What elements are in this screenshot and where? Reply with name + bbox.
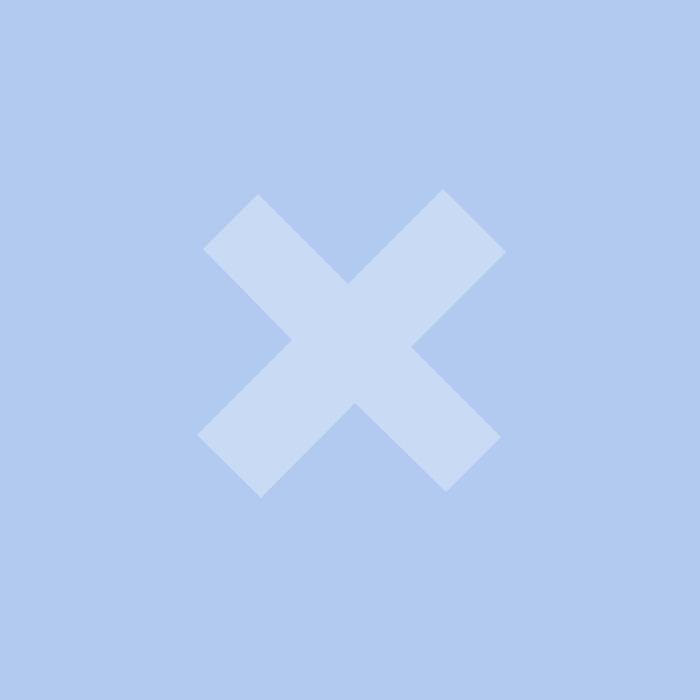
icon: X mark — [197, 189, 506, 498]
